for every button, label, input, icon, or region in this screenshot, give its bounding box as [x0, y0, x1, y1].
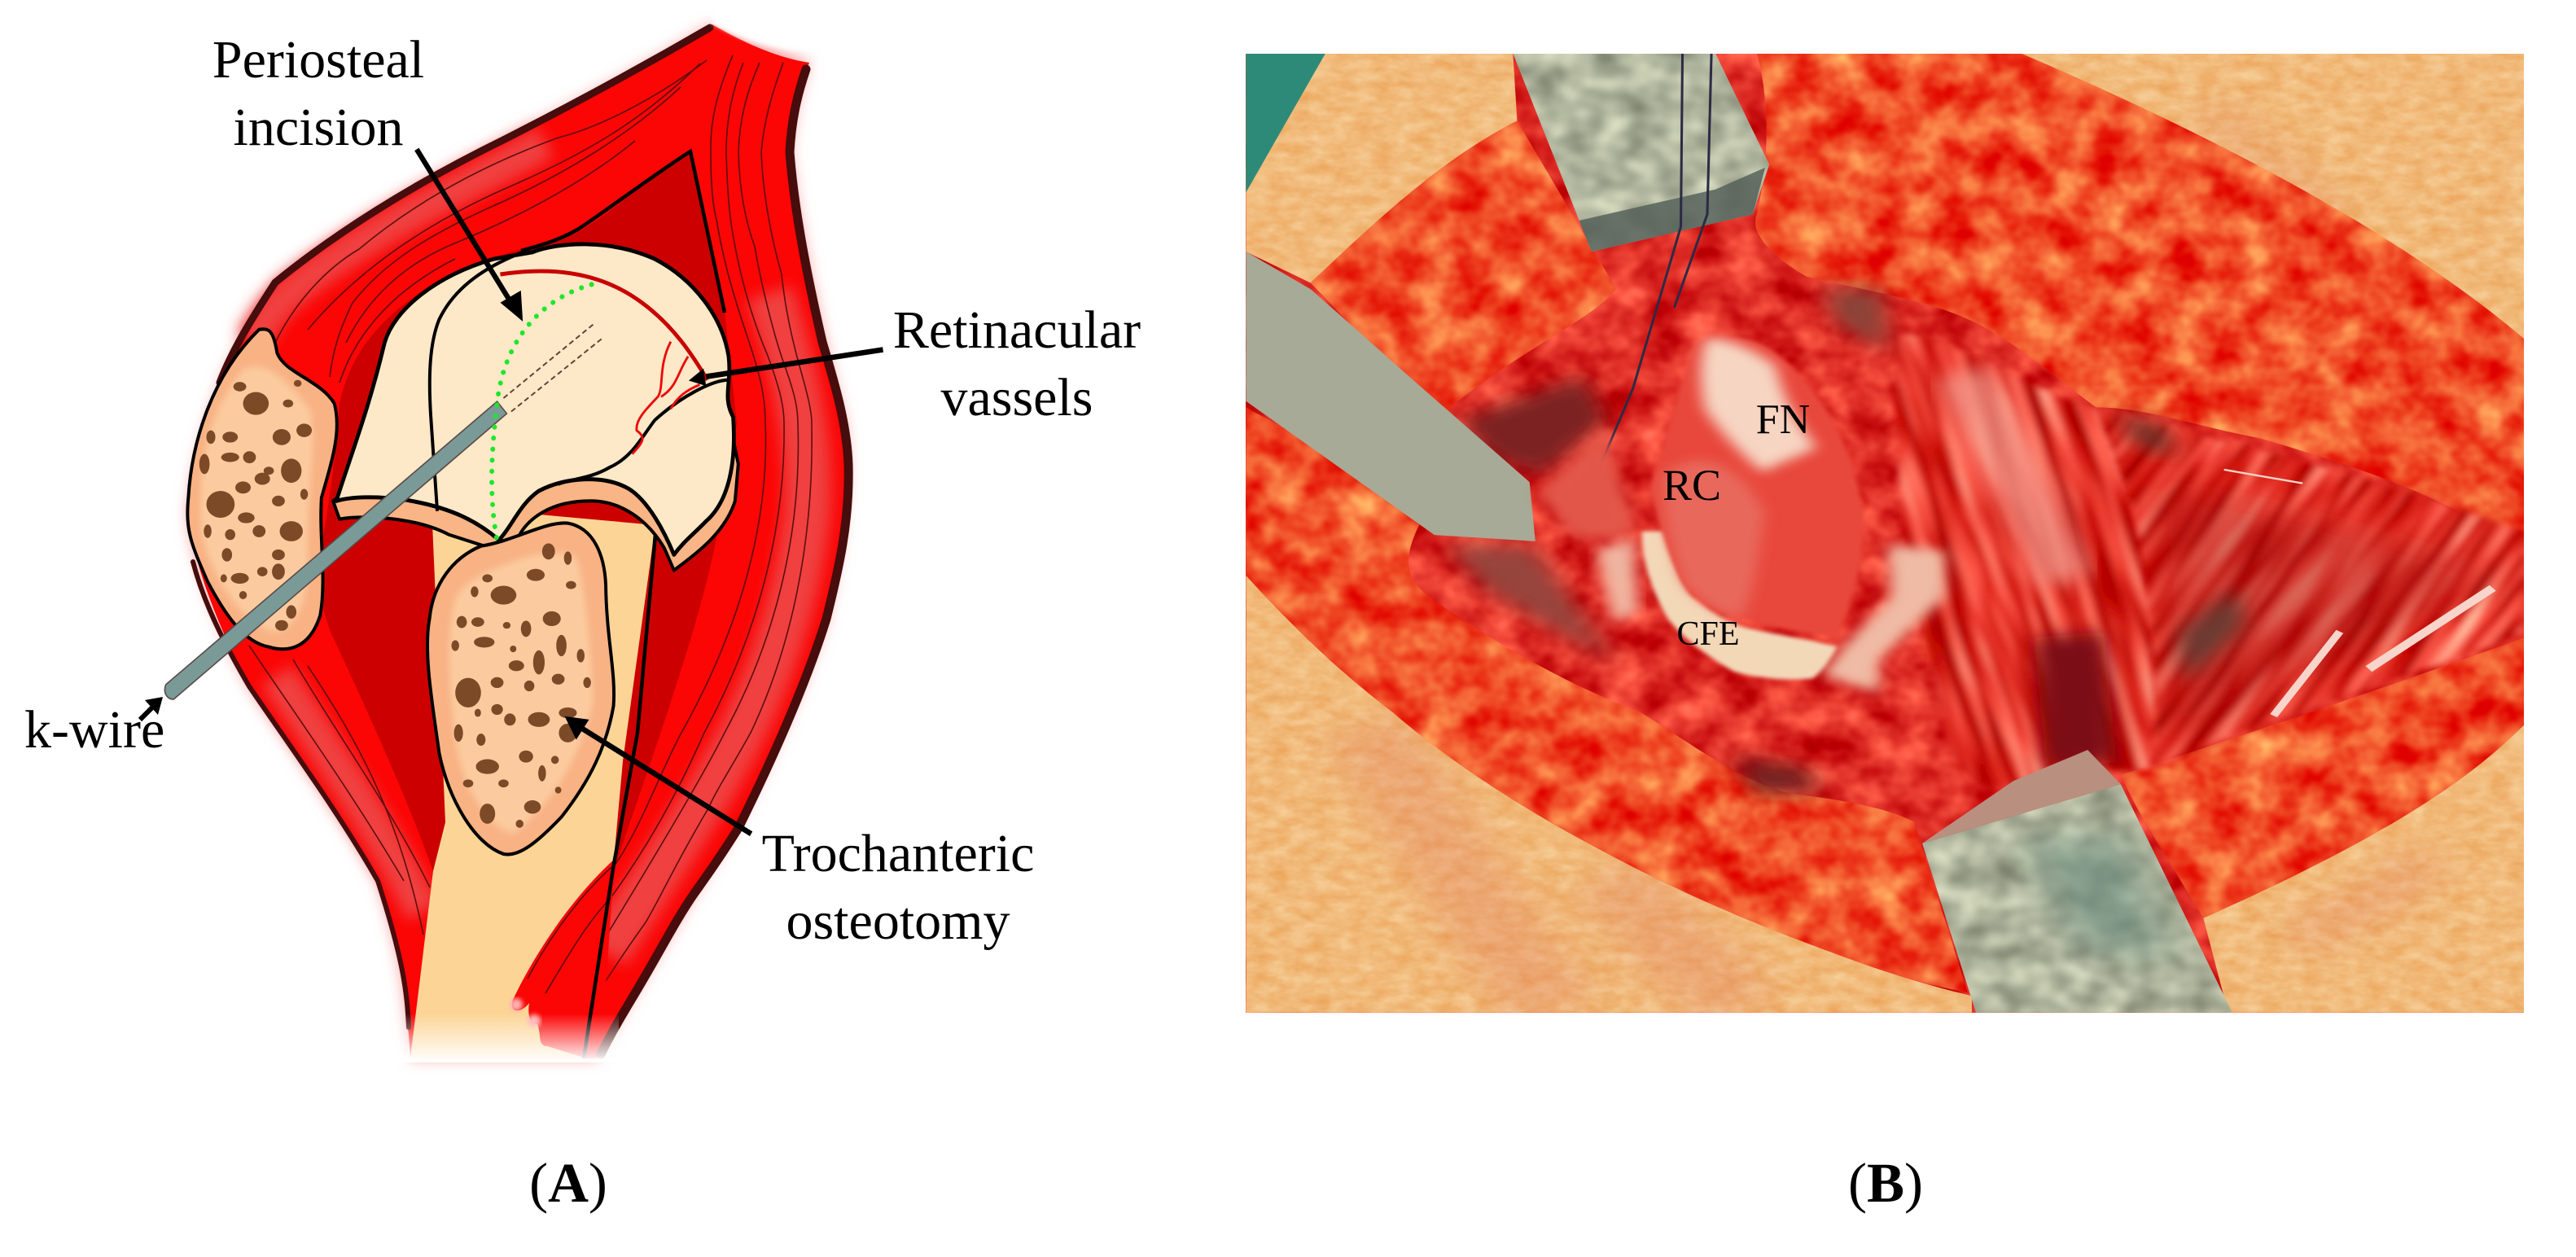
right muscle fibres	[1805, 206, 2576, 1019]
label: Retinacular vassels: Retinacular	[893, 300, 1141, 360]
panel B: intraoperative photograph	[1228, 40, 2576, 1036]
femoral head	[336, 244, 734, 554]
tendon sheen	[1962, 372, 2066, 581]
label: k-wire: k-wire	[24, 700, 164, 760]
photo artwork	[1228, 40, 2576, 1036]
bottom retractor shading	[2022, 837, 2171, 961]
capsule flap and head	[333, 404, 738, 570]
upper-left fat layer	[1311, 120, 1616, 410]
thin cavity left line	[340, 259, 455, 383]
cavity edge line	[521, 151, 725, 313]
cream bone patch	[1701, 338, 1817, 472]
photo label FN: FN	[1756, 396, 1810, 443]
label: Trochanteric osteotomy: Trochanteric	[762, 824, 1034, 883]
photo label CFE: CFE	[1676, 615, 1740, 653]
pale crest right	[1821, 545, 1945, 693]
incision red arc	[500, 271, 708, 380]
retinacular vessels	[632, 342, 699, 454]
arrow: retinacular vessels	[689, 350, 883, 386]
bottom retractor	[1914, 775, 2245, 1024]
femoral neck	[1649, 336, 1864, 637]
femoral shaft	[410, 505, 655, 1058]
bottom fade	[391, 1014, 619, 1062]
deep cavity	[320, 151, 737, 871]
pale patch left	[1597, 537, 1638, 622]
green dotted osteotomy line	[492, 284, 592, 541]
finger tips fade	[510, 998, 541, 1027]
wound base tissue	[1228, 40, 2551, 1036]
lower-right fat layer	[2121, 638, 2524, 918]
panel A: hip surgical diagram	[24, 0, 1141, 1062]
bottom retractor top edge	[1922, 750, 2121, 843]
outer muscle outline	[193, 28, 848, 1054]
sutures	[1600, 54, 1711, 466]
label: Trochanteric osteotomy: osteotomy	[786, 891, 1010, 951]
muscle body	[188, 24, 847, 1058]
arrow: trochanteric osteotomy	[565, 716, 751, 834]
femoral head crescent	[1642, 532, 1837, 680]
muscle glow	[188, 24, 847, 1058]
central trochanteric bone fragment	[427, 523, 614, 855]
label: Periosteal incision: Periosteal	[212, 30, 424, 90]
caption (A): (A)	[529, 1152, 607, 1214]
diagram artwork in traced coordinates	[164, 149, 883, 855]
head boundary lines	[430, 251, 729, 511]
left retractor	[1246, 252, 1536, 541]
top fade	[712, 0, 822, 50]
dashed drill guides	[503, 324, 603, 412]
upper fat layer	[1755, 54, 2524, 532]
dark soft-tissue patches	[1447, 289, 2245, 794]
mottled capsule	[1662, 461, 1765, 619]
white tendon streaks	[2224, 470, 2493, 716]
green drape	[1246, 54, 1325, 192]
lower-left fat layer	[1246, 407, 1968, 993]
finger fibres	[528, 863, 616, 993]
skin	[1228, 40, 2551, 1036]
left trochanteric bone fragment	[187, 329, 337, 649]
photo label RC: RC	[1663, 461, 1721, 510]
lower muscle fingers	[512, 859, 615, 1058]
lighter muscle stripes	[252, 142, 808, 953]
label: Retinacular vassels: vassels	[941, 368, 1093, 427]
central muscle fibres	[1890, 329, 2158, 788]
top retractor lower edge	[1579, 168, 1765, 252]
caption (B): (B)	[1848, 1152, 1923, 1214]
muscle fibres	[249, 55, 812, 1045]
capsule tissue left	[1538, 426, 1633, 538]
label: Periosteal incision: incision	[233, 98, 404, 157]
shaft outline	[584, 525, 656, 1058]
top retractor	[1500, 46, 1781, 258]
arrow: k-wire	[140, 697, 163, 720]
right muscle shading	[2153, 488, 2501, 743]
skin bloodstains	[1369, 108, 2426, 1011]
arrow: periosteal incision	[417, 149, 523, 322]
k-wire	[164, 401, 506, 699]
